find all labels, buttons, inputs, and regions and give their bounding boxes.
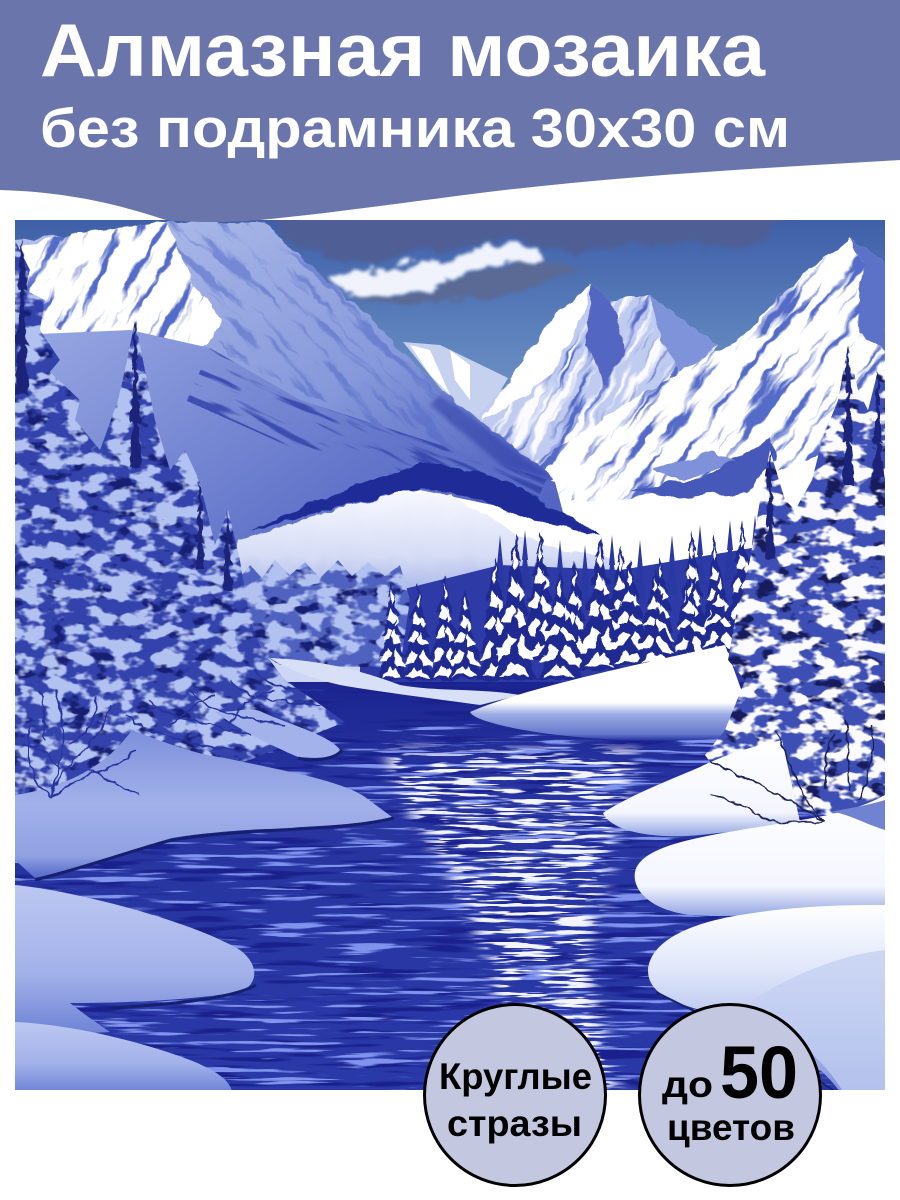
centre mountains: [482, 284, 718, 462]
white cloud: [328, 245, 580, 306]
badge: up to 50 colours: 50: [720, 1031, 798, 1114]
badge: up to 50 colours: цветов: [667, 1107, 795, 1148]
left tree spines: [14, 235, 233, 590]
far forest band: [360, 515, 756, 682]
right forest mass: [705, 345, 885, 830]
pale forest left: [238, 560, 410, 668]
snow ground behind shore: [268, 658, 360, 682]
left big mountain: [15, 220, 554, 481]
white fir forest: [378, 520, 758, 680]
right tree spines: [765, 345, 883, 560]
bare bushes right: [712, 720, 873, 822]
dark tree bands: [187, 348, 600, 536]
sky: [15, 220, 885, 392]
painting: winter mountain river: [15, 220, 885, 1090]
right mountain: [535, 237, 885, 502]
left forest mass: [15, 240, 345, 810]
distant peak: [403, 342, 508, 425]
dark cloud: [276, 220, 782, 264]
mid slope: [42, 330, 563, 546]
title: Алмазная мозаика: [40, 8, 766, 92]
badge: up to 50 colours: до: [662, 1064, 713, 1105]
header banner: [0, 0, 900, 222]
badge: round rhinestones: [424, 1004, 606, 1186]
subtitle: без подрамника 30х30 см: [40, 97, 790, 159]
snow hill: [236, 490, 610, 588]
badge: round rhinestones: Круглые: [439, 1056, 592, 1097]
ripples: [15, 712, 814, 1088]
bare bushes left: [22, 670, 325, 798]
river: [15, 682, 885, 1095]
right snow banks: [603, 740, 885, 1095]
left snow banks: [15, 709, 394, 1092]
badge: round rhinestones: стразы: [447, 1103, 582, 1144]
far snow shore: [270, 645, 745, 741]
badge: up to 50 colours: [640, 1004, 820, 1186]
reflections: [385, 750, 640, 1095]
